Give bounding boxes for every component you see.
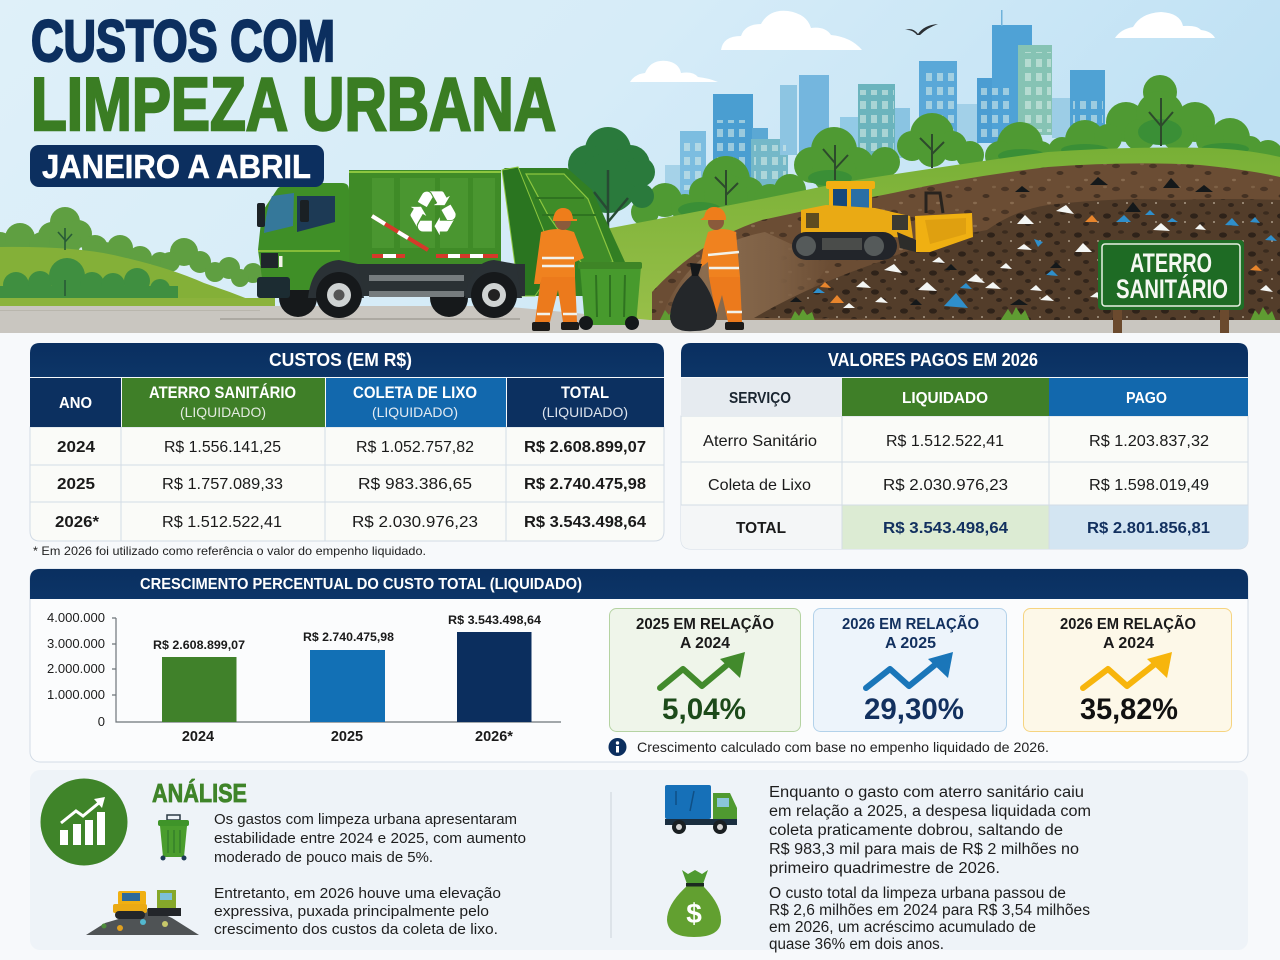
header row — [30, 378, 664, 427]
arrow — [660, 652, 745, 688]
table body — [30, 427, 664, 541]
text block: custo total — [769, 885, 1090, 953]
left back trees — [0, 207, 263, 287]
sign: aterro sanitário — [1098, 240, 1244, 333]
row aterro: R$ 1.512.522,41 — [886, 433, 1004, 450]
right hillside — [600, 148, 1280, 333]
header row — [681, 378, 1248, 416]
bar 2026: R$ 3.543.498,64 — [448, 613, 541, 627]
front wheels — [316, 272, 362, 318]
card: 2026 vs 2025: A 2025 — [885, 635, 936, 652]
road — [0, 306, 1280, 333]
bar chart: 1.000.000 — [47, 687, 105, 702]
bar chart: 0 — [98, 714, 105, 729]
text block: coleta: primeiro quadrimestre de 2026. — [769, 860, 1000, 877]
row total: R$ 3.543.498,64 — [883, 520, 1008, 537]
table title — [30, 343, 664, 377]
icon: recycle symbol: ♻ — [405, 177, 461, 250]
row 2025: R$ 983.386,65 — [358, 476, 472, 493]
icon: trash bin — [158, 815, 189, 860]
row total — [736, 520, 1210, 537]
growth note: Crescimento calculado com base no empenho liquidado de 2026. — [637, 739, 1049, 755]
text block: estabilidade: estabilidade entre 2024 e 2025, com aumento — [214, 830, 526, 847]
hero illustration — [0, 0, 1280, 333]
bar 2026 — [448, 613, 541, 745]
panel heading — [30, 569, 1248, 599]
title: CUSTOS COM — [31, 9, 335, 74]
chassis — [340, 264, 525, 296]
row 2026: R$ 3.543.498,64 — [524, 514, 646, 531]
text block: elevação: Entretanto, em 2026 houve uma elevação — [214, 885, 501, 902]
worker with bin — [532, 208, 584, 331]
text block: coleta: coleta praticamente dobrou, saltando de — [769, 822, 1063, 839]
arrow — [866, 652, 953, 688]
text block: coleta: R$ 983,3 mil para mais de R$ 2 milhões no — [769, 841, 1079, 858]
header row: (LIQUIDADO) — [372, 404, 458, 420]
bar 2025 — [303, 630, 394, 745]
row 2024: R$ 1.556.141,25 — [164, 439, 281, 456]
heading: ANÁLISE — [152, 778, 247, 808]
row coleta: R$ 1.598.019,49 — [1089, 477, 1209, 494]
sign: aterro sanitário: SANITÁRIO — [1116, 273, 1228, 304]
card: 2025 vs 2024: 5,04% — [662, 693, 746, 726]
panel: análise — [30, 770, 1248, 953]
date badge: JANEIRO A ABRIL — [42, 148, 311, 185]
row 2026: 2026* — [55, 514, 100, 531]
table title: VALORES PAGOS EM 2026 — [828, 350, 1038, 370]
hazard stripes — [372, 216, 428, 250]
text block: custo total: em 2026, um acréscimo acumulado de — [769, 919, 1036, 936]
table title: CUSTOS (EM R$) — [269, 350, 412, 370]
left foreground bushes — [0, 258, 178, 299]
header row: ATERRO SANITÁRIO — [149, 383, 296, 402]
footnote: * Em 2026 foi utilizado como referência o valor do empenho liquidado. — [33, 544, 426, 558]
row total: R$ 2.801.856,81 — [1087, 520, 1210, 537]
card: 2026 vs 2025: 2026 EM RELAÇÃO — [842, 613, 979, 633]
card: 2026 vs 2024: 35,82% — [1080, 693, 1178, 726]
bulldozer — [792, 181, 973, 260]
row aterro: R$ 1.203.837,32 — [1089, 433, 1209, 450]
title: LIMPEZA URBANA — [31, 62, 556, 146]
header row: COLETA DE LIXO — [353, 383, 477, 402]
bar 2025: R$ 2.740.475,98 — [303, 630, 394, 644]
row 2026: R$ 1.512.522,41 — [162, 514, 282, 531]
bar 2024: R$ 2.608.899,07 — [153, 638, 245, 652]
text block: custo total: R$ 2,6 milhões em 2024 para R$ 3,54 milhões — [769, 902, 1090, 919]
card: 2026 vs 2024: 2026 EM RELAÇÃO — [1060, 613, 1196, 633]
text block: estabilidade: Os gastos com limpeza urbana apresentaram — [214, 811, 517, 828]
icon: growth chart circle — [40, 778, 128, 866]
card: 2025 vs 2024: A 2024 — [680, 635, 730, 652]
title — [31, 9, 556, 146]
icon: blue truck — [665, 785, 737, 834]
icon: info — [608, 738, 626, 756]
header row: LIQUIDADO — [902, 390, 988, 407]
text block: estabilidade: moderado de pouco mais de 5%. — [214, 849, 433, 866]
row 2024 — [57, 439, 646, 456]
text block: custo total: quase 36% em dois anos. — [769, 936, 944, 953]
rear loader — [502, 168, 627, 296]
panel: crescimento percentual — [30, 569, 1248, 762]
row 2025: 2025 — [57, 476, 95, 493]
row total: TOTAL — [736, 520, 786, 537]
text block: custo total: O custo total da limpeza urbana passou de — [769, 885, 1066, 902]
table title — [681, 343, 1248, 377]
text block: elevação — [214, 885, 501, 938]
row coleta: R$ 2.030.976,23 — [883, 477, 1008, 494]
icon: bird — [905, 24, 938, 35]
icon: money bag: $ — [686, 898, 702, 929]
back wheels — [279, 279, 317, 317]
text block: coleta — [769, 784, 1091, 877]
arrow — [1083, 652, 1172, 688]
row 2024: R$ 1.052.757,82 — [356, 439, 474, 456]
grass tufts — [660, 307, 1276, 321]
landfill pile — [652, 163, 1280, 322]
worker with bag — [670, 207, 744, 331]
bar 2026: 2026* — [475, 729, 513, 745]
text block: elevação: expressiva, puxada principalmente pelo — [214, 903, 489, 920]
bar 2024 — [153, 638, 245, 745]
sign: aterro sanitário: ATERRO — [1130, 248, 1212, 278]
panel: valores pagos table — [681, 343, 1248, 549]
text block: estabilidade — [214, 811, 526, 866]
dark tree behind truck — [568, 127, 655, 260]
card: 2025 vs 2024 — [610, 608, 800, 732]
row aterro — [703, 433, 1209, 450]
bar chart: 4.000.000 — [47, 610, 105, 625]
header row: (LIQUIDADO) — [542, 404, 628, 420]
panel: custos table — [30, 343, 664, 541]
row 2025 — [57, 476, 646, 493]
cargo box — [349, 170, 501, 264]
green bin — [578, 262, 642, 330]
bar chart: 3.000.000 — [47, 636, 105, 651]
row 2026 — [55, 514, 646, 531]
row 2026: R$ 2.030.976,23 — [352, 514, 478, 531]
card: 2026 vs 2024 — [1024, 608, 1232, 732]
card: 2026 vs 2024: A 2024 — [1103, 635, 1154, 652]
bar chart — [47, 610, 561, 745]
header row: TOTAL — [561, 383, 609, 402]
clouds — [630, 11, 1215, 82]
row aterro: Aterro Sanitário — [703, 433, 817, 450]
header row: SERVIÇO — [729, 390, 791, 407]
row 2024: R$ 2.608.899,07 — [524, 439, 646, 456]
text block: coleta: Enquanto o gasto com aterro sanitário caiu — [769, 784, 1084, 801]
card: 2025 vs 2024: 2025 EM RELAÇÃO — [636, 613, 774, 633]
row 2024: 2024 — [57, 439, 95, 456]
garbage truck — [257, 167, 627, 318]
text block: coleta: em relação a 2025, a despesa liquidada com — [769, 803, 1091, 820]
bar chart: 2.000.000 — [47, 661, 105, 676]
icon: bulldozer on landfill — [86, 890, 199, 935]
cab — [309, 177, 319, 183]
panel heading: CRESCIMENTO PERCENTUAL DO CUSTO TOTAL (LIQUIDADO) — [140, 576, 582, 593]
trees behind right hill — [631, 75, 1280, 226]
icon: money bag — [667, 870, 721, 937]
header row: PAGO — [1126, 390, 1167, 407]
row coleta: Coleta de Lixo — [708, 477, 811, 494]
row 2025: R$ 2.740.475,98 — [524, 476, 646, 493]
bar 2025: 2025 — [331, 729, 363, 745]
card: 2026 vs 2025 — [814, 608, 1006, 732]
header row: ANO — [59, 395, 92, 412]
row 2025: R$ 1.757.089,33 — [162, 476, 283, 493]
city skyline — [665, 10, 1105, 200]
garbage bag — [670, 275, 717, 331]
bar 2024: 2024 — [182, 729, 214, 745]
text block: elevação: crescimento dos custos da coleta de lixo. — [214, 921, 498, 938]
header row: (LIQUIDADO) — [180, 404, 266, 420]
row coleta — [708, 477, 1209, 494]
card: 2026 vs 2025: 29,30% — [864, 693, 964, 726]
